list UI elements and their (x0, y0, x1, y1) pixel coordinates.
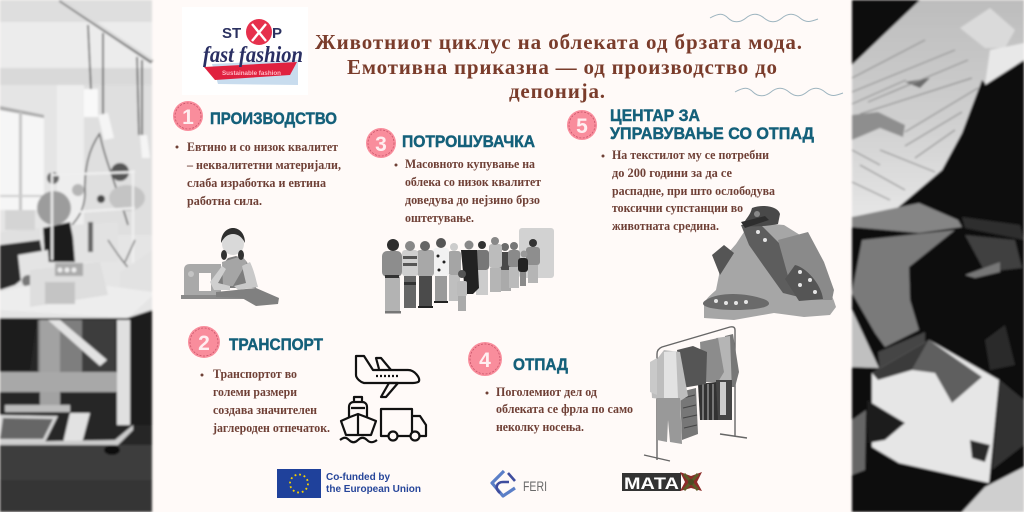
icon: seamstress at sewing machine (181, 228, 279, 306)
text: transport: јаглероден отпечаток. (212, 421, 330, 435)
number badge 5: 5 (576, 115, 588, 138)
title: депонија. (509, 79, 605, 103)
step 4: waste (468, 327, 747, 461)
text: waste management centre: токсични супстанции во (612, 201, 743, 215)
number badge 2 (188, 326, 220, 358)
heading: waste: ОТПАД (513, 356, 568, 374)
number badge 4 (468, 342, 502, 376)
text: waste: неколку носења. (496, 420, 584, 434)
number badge 3 (366, 128, 396, 158)
text: waste management centre: На текстилот му се потребни (612, 148, 769, 162)
photo: garment factory (0, 0, 152, 512)
heading: waste management centre: УПРАВУВАЊЕ СО ОТПАД (610, 125, 814, 143)
logo: Stop Fast Fashion: ST (222, 25, 241, 42)
text: waste (486, 385, 633, 434)
number badge 2: 2 (198, 332, 210, 355)
icon: person under clothes pile (703, 206, 836, 320)
logo: MATA (622, 472, 702, 493)
text: production: Евтино и со низок квалитет (187, 140, 338, 154)
text: waste: облеката се фрла по само (496, 402, 633, 416)
text: waste: Поголемиот дел од (496, 385, 598, 399)
heading: waste management centre (610, 107, 814, 143)
number badge 1 (173, 101, 203, 131)
heading: consumer: ПОТРОШУВАЧКА (402, 133, 535, 151)
title (315, 30, 802, 103)
logo: EU co-funded (277, 469, 421, 498)
text: consumer: оштетување. (405, 211, 474, 225)
text: consumer: облека со низок квалитет (405, 175, 541, 189)
text: transport: Транспортот во (213, 367, 297, 381)
logo: Stop Fast Fashion (182, 7, 308, 95)
number badge 3: 3 (375, 133, 387, 156)
logo: Stop Fast Fashion: fast fashion (203, 42, 303, 67)
heading: production: ПРОИЗВОДСТВО (210, 110, 337, 128)
icon: airplane (356, 356, 419, 397)
text: transport: големи размери (213, 385, 297, 399)
text: transport (200, 367, 330, 435)
icon: queue of shoppers (382, 228, 554, 314)
step 1: production (173, 101, 341, 306)
text: production (176, 140, 341, 208)
text: waste management centre (602, 148, 776, 233)
step 5: waste management centre (567, 107, 836, 320)
logo: MATA: МАТА (624, 474, 679, 493)
logo: Stop Fast Fashion: P (272, 25, 282, 42)
text: consumer (394, 157, 541, 225)
photo: pile of discarded clothes (852, 0, 1024, 512)
text: consumer: доведува до нејзино брзо (405, 193, 540, 207)
text: consumer: Масовното купување на (405, 157, 536, 171)
text: waste management centre: до 200 години за да се (612, 166, 732, 180)
step 3: consumer (366, 128, 554, 314)
title: Животниот циклус на облеката од брзата мода. (315, 30, 802, 54)
title: Емотивна приказна — од производство до (347, 55, 777, 79)
text: production: – неквалитетни материјали, (186, 158, 341, 172)
text: waste management centre: распадне, при што ослободува (612, 184, 776, 198)
logo: EU co-funded: Co-funded by (326, 472, 390, 483)
number badge 4: 4 (479, 349, 491, 372)
heading: transport: ТРАНСПОРТ (229, 336, 323, 354)
logo: Stop Fast Fashion: Sustainable fashion (222, 70, 281, 77)
number badge 5 (567, 110, 597, 140)
logo: FERI: FERI (523, 478, 547, 494)
text: production: работна сила. (187, 194, 262, 208)
text: production: слаба изработка и евтина (187, 176, 327, 190)
text: transport: создава значителен (213, 403, 317, 417)
number badge 1: 1 (182, 106, 194, 129)
logo: EU co-funded: the European Union (326, 484, 421, 495)
heading: waste management centre: ЦЕНТАР ЗА (610, 107, 700, 125)
step 2: transport (188, 326, 426, 442)
icon: clothes rack (644, 327, 747, 461)
logo: FERI (492, 471, 547, 496)
icon: truck (381, 409, 426, 440)
decorative wave lower (735, 88, 843, 96)
text: waste management centre: животната средина. (612, 219, 719, 233)
icon: ship (340, 397, 377, 442)
decorative wave top (710, 14, 818, 22)
